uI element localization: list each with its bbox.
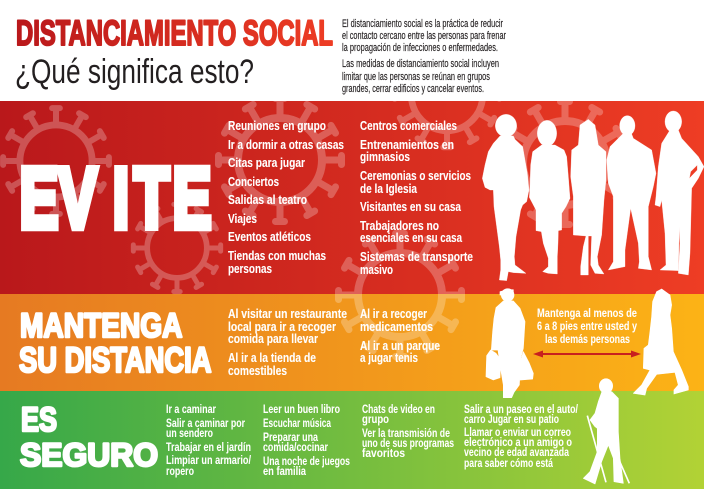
- list: es seguro column 3: favoritos: [362, 447, 405, 460]
- callout: distance text: [537, 307, 637, 346]
- intro text block: El distanciamiento social es la práctica de reducir: [342, 18, 503, 30]
- list: es seguro column 4: vecino de edad avanzada: [464, 446, 569, 459]
- icon: man walking with bags: [486, 289, 533, 398]
- panel: evite background: [0, 101, 704, 294]
- list: mantenga column 2: Al ir a recoger: [360, 307, 427, 321]
- icon: woman walking with bag: [633, 289, 688, 395]
- list: evite column 1: Reuniones en grupo: [228, 118, 326, 133]
- intro text block: la propagación de infecciones o enfermedades.: [342, 42, 498, 54]
- list: evite column 1: Eventos atléticos: [228, 229, 311, 244]
- list: mantenga column 2: [360, 307, 440, 365]
- list: evite column 2: Trabajadores no: [360, 218, 439, 233]
- list: es seguro column 4: carro Jugar en su patio: [464, 413, 559, 426]
- list: es seguro column 1: ropero: [166, 465, 194, 478]
- list: es seguro column 4: para saber cómo está: [464, 457, 553, 470]
- callout: distance text: 6 a 8 pies entre usted y: [537, 320, 637, 333]
- list: mantenga column 1: comida para llevar: [228, 332, 318, 346]
- list: evite column 1: Salidas al teatro: [228, 192, 307, 207]
- list: evite column 1: Ir a dormir a otras casas: [228, 137, 344, 152]
- list: evite column 1: personas: [228, 261, 272, 276]
- list: evite column 2: gimnasios: [360, 149, 410, 164]
- list: evite column 2: Entrenamientos en: [360, 137, 454, 152]
- list: es seguro column 3: [362, 403, 454, 460]
- list: es seguro column 2: Una noche de juegos: [263, 455, 350, 468]
- list: evite column 2: Visitantes en su casa: [360, 199, 462, 214]
- heading: es seguro: SEGURO: [20, 437, 158, 473]
- list: mantenga column 1: Al ir a la tienda de: [228, 351, 316, 365]
- list: es seguro column 4: electrónico a un amigo o: [464, 436, 572, 449]
- list: es seguro column 2: Escuchar música: [263, 417, 331, 430]
- list: es seguro column 2: [263, 403, 350, 478]
- list: es seguro column 2: Preparar una: [263, 431, 318, 444]
- list: evite column 2: esenciales en su casa: [360, 230, 463, 245]
- list: es seguro column 1: [166, 403, 252, 478]
- list: es seguro column 2: en familia: [263, 465, 306, 478]
- list: es seguro column 4: Salir a un paseo en el auto/: [464, 403, 579, 416]
- panel: mantenga su distancia background: [0, 294, 704, 391]
- list: mantenga column 2: a jugar tenis: [360, 351, 418, 365]
- heading: mantenga su distancia: MANTENGA: [20, 307, 182, 345]
- list: evite column 1: Citas para jugar: [228, 155, 305, 170]
- list: evite column 2: Centros comerciales: [360, 118, 457, 133]
- list: evite column 1: Conciertos: [228, 174, 279, 189]
- list: es seguro column 1: Limpiar un armario/: [166, 454, 252, 467]
- list: es seguro column 2: comida/cocinar: [263, 441, 328, 454]
- icon: elderly person with walking poles: [583, 379, 629, 484]
- intro text block: grandes, cerrar edificios y cancelar eventos.: [342, 83, 484, 95]
- list: evite column 1: [228, 118, 344, 276]
- list: evite column 2: de la Iglesia: [360, 181, 418, 196]
- intro text block: el contacto cercano entre las personas para frenar: [342, 30, 506, 42]
- heading: mantenga su distancia: SU DISTANCIA: [19, 340, 212, 380]
- list: mantenga column 2: medicamentos: [360, 320, 433, 334]
- list: es seguro column 3: uno de sus programas: [362, 437, 454, 450]
- list: evite column 2: Ceremonias o servicios: [360, 168, 471, 183]
- list: es seguro column 1: un sendero: [166, 427, 213, 440]
- list: es seguro column 1: Trabajar en el jardín: [166, 441, 251, 454]
- list: es seguro column 3: Chats de video en: [362, 403, 435, 416]
- icon: group of five people silhouettes: [482, 111, 704, 281]
- list: es seguro column 1: Ir a caminar: [166, 403, 216, 416]
- list: es seguro column 4: Llamar o enviar un correo: [464, 426, 571, 439]
- heading: evite: EVITE: [20, 151, 211, 246]
- intro text block: limitar que las personas se reúnan en grupos: [342, 71, 490, 83]
- arrow: double headed distance arrow: [533, 350, 641, 358]
- list: es seguro column 2: Leer un buen libro: [263, 403, 340, 416]
- list: mantenga column 1: comestibles: [228, 364, 287, 378]
- callout: distance text: Mantenga al menos de: [537, 307, 637, 320]
- list: mantenga column 1: local para ir a recoger: [228, 320, 336, 334]
- list: es seguro column 1: Salir a caminar por: [166, 417, 245, 430]
- list: mantenga column 1: [228, 307, 347, 378]
- heading: mantenga su distancia: [19, 307, 212, 380]
- list: mantenga column 2: Al ir a un parque: [360, 339, 440, 353]
- list: evite column 2: [360, 118, 473, 277]
- virus icons background: [0, 101, 623, 360]
- heading: es seguro: ES: [21, 401, 57, 439]
- list: evite column 1: Tiendas con muchas: [228, 248, 326, 263]
- list: mantenga column 1: Al visitar un restaurante: [228, 307, 347, 321]
- panel: es seguro background: [0, 391, 704, 489]
- list: es seguro column 3: Ver la transmisión de: [362, 427, 450, 440]
- intro text block: [342, 18, 506, 95]
- intro text block: Las medidas de distanciamiento social incluyen: [342, 58, 499, 70]
- list: evite column 1: Viajes: [228, 211, 257, 226]
- heading: es seguro: [20, 401, 158, 473]
- list: evite column 2: Sistemas de transporte: [360, 249, 473, 264]
- subtitle: question: ¿Qué significa esto?: [15, 53, 254, 91]
- list: es seguro column 3: grupo: [362, 413, 389, 426]
- list: evite column 2: masivo: [360, 262, 393, 277]
- title: Distanciamiento social: DISTANCIAMIENTO SOCIAL: [16, 13, 333, 53]
- callout: distance text: las demás personas: [545, 333, 630, 346]
- list: es seguro column 4: [464, 403, 579, 470]
